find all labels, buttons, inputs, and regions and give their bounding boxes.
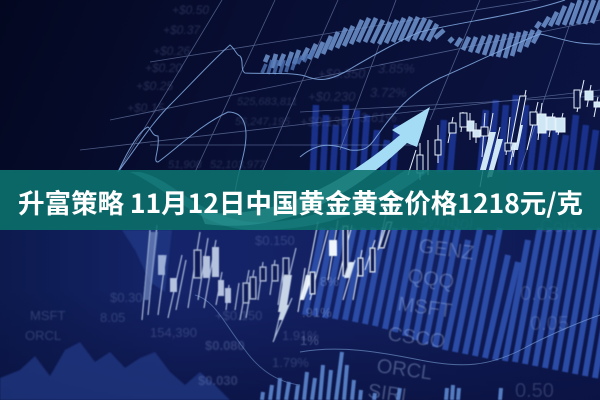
- faint ticker symbols, lower right: Coin: [540, 216, 577, 236]
- faint market figures, lower left: $0.030: [198, 373, 238, 388]
- faint market figures, upper area: 3.85%: [378, 61, 415, 76]
- faint ticker symbols, lower right: 8%: [320, 274, 339, 289]
- faint market figures, lower left: $0.150: [255, 233, 295, 248]
- candlesticks, upper right: [408, 80, 600, 187]
- faint market figures, upper area: 3.72%: [370, 85, 407, 100]
- candlesticks, lower centre-left: [142, 225, 296, 342]
- faint market figures, lower left: +$0.150: [215, 308, 262, 323]
- faint market figures, lower left: $0.30: [110, 290, 143, 305]
- faint market figures, upper area: 525,683,811: [237, 96, 297, 108]
- faint ticker symbols, lower right: 0.05: [530, 313, 569, 335]
- faint market figures, upper area: 52,103,977: [210, 159, 266, 171]
- faint market figures, upper area: 51,908: [168, 159, 203, 171]
- faint market figures, upper area: +$0.26: [153, 44, 190, 58]
- teal title band: [0, 170, 600, 230]
- faint market figures, lower left: $0.080: [205, 338, 245, 353]
- blue volume bars, lower left: [0, 230, 230, 400]
- faint market figures, upper area: +$0.37: [163, 23, 201, 37]
- light blue volume band, centre-left: [262, 50, 314, 74]
- faint market figures, lower left: 154,390: [150, 325, 197, 340]
- faint ticker symbols, lower right: 1%: [300, 333, 319, 348]
- faint market figures, upper area: +$0.130: [300, 114, 348, 129]
- faint market figures, upper area: +$0.25: [136, 79, 173, 93]
- faint market figures, lower left: MSFT: [30, 308, 65, 323]
- faint market figures, upper area: 3.61%: [360, 110, 397, 125]
- faint market figures, upper area: +$0.15: [127, 101, 164, 115]
- faint ticker symbols, lower right: QQQ: [406, 265, 456, 293]
- faint market figures, lower left: 1.91%: [282, 328, 319, 343]
- faint market figures, upper area: +$0.20: [145, 61, 182, 75]
- faint market figures, upper area: 56,247,195: [235, 116, 291, 128]
- faint ticker symbols, lower right: [300, 207, 577, 400]
- light blue volume band, upper: [265, 0, 600, 68]
- faint market figures, lower left: 1.79%: [272, 355, 309, 370]
- faint ticker symbols, lower right: ORCL: [375, 355, 433, 385]
- faint market figures, upper area: [127, 3, 415, 171]
- faint market figures, lower left: 8.05: [100, 310, 125, 325]
- faint ticker symbols, lower right: .91%: [302, 305, 332, 320]
- faint ticker symbols, lower right: MSFT: [396, 293, 453, 323]
- title text: 升富策略 11月12日中国黄金黄金价格1218元/克: [18, 182, 583, 221]
- perspective grid lines: [80, 0, 600, 172]
- faint market figures, lower left: [25, 233, 319, 388]
- upward arrow: [200, 107, 430, 226]
- candlesticks, lower centre-right: [298, 205, 392, 312]
- faint market figures, upper area: +$0.350: [318, 66, 366, 81]
- blue volume bars, lower right: [305, 228, 600, 378]
- faint market figures, lower left: ORCL: [25, 328, 61, 343]
- faint ticker symbols, lower right: GENZ: [417, 235, 475, 265]
- faint ticker symbols, lower right: 0.03: [520, 283, 559, 305]
- faint ticker symbols, lower right: CSCO: [386, 323, 447, 353]
- faint market figures, upper area: +$0.50: [172, 3, 209, 17]
- faint market figures, upper area: +$0.230: [308, 89, 356, 104]
- faint ticker symbols, lower right: Symbol: [415, 207, 474, 234]
- trend lines: [118, 0, 600, 385]
- histogram bars, bottom centre: [262, 352, 501, 400]
- blue volume bars behind upper candles: [313, 95, 596, 172]
